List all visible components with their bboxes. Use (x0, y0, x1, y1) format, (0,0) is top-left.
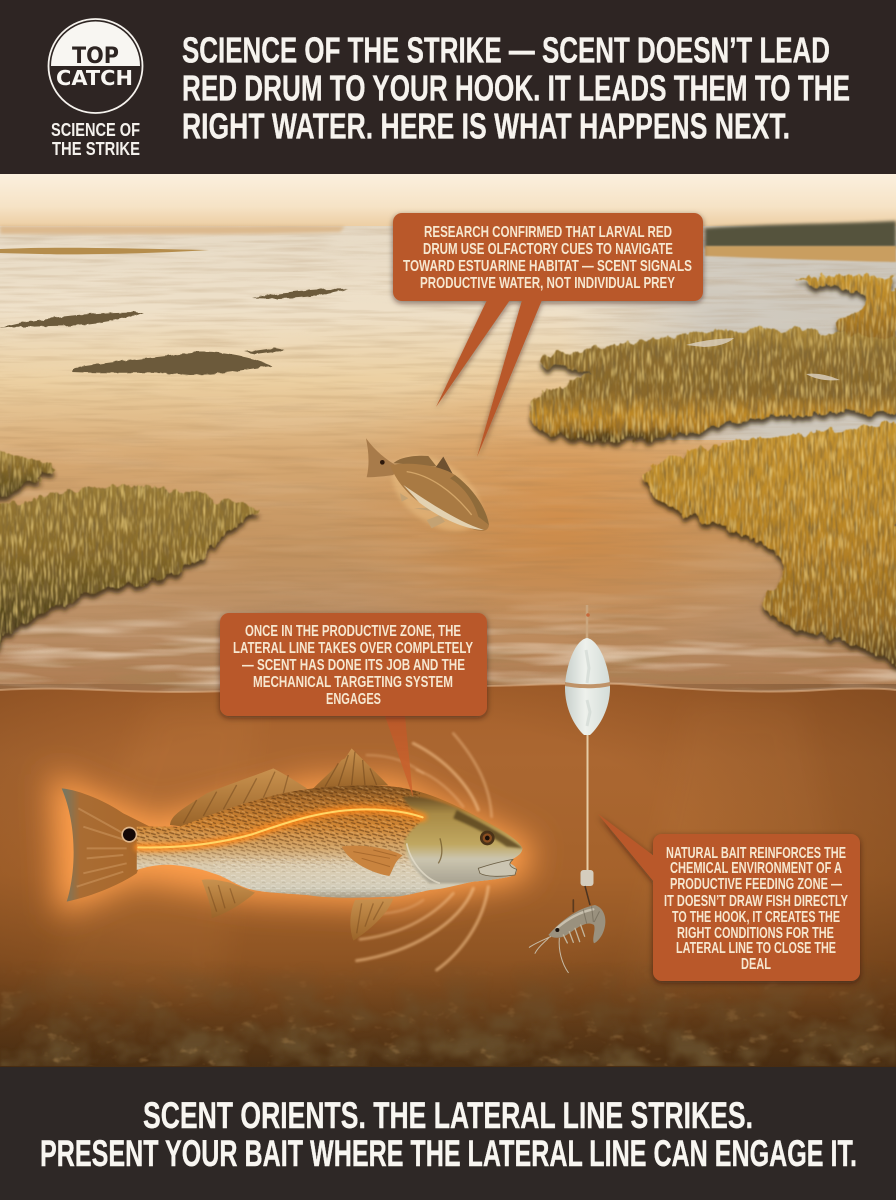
callout pointer (385, 716, 413, 797)
body (133, 783, 527, 900)
dorsal fins (170, 748, 388, 827)
glow halo (62, 787, 522, 902)
logo caption: SCIENCE OF (51, 120, 140, 140)
tail (366, 438, 398, 477)
callout text (233, 623, 473, 708)
logo badge: CATCH (56, 66, 133, 90)
callout: natural bait (598, 814, 860, 981)
logo badge (48, 19, 142, 113)
headline (182, 30, 850, 146)
callout pointer (598, 814, 654, 882)
logo badge: TOP (72, 44, 119, 69)
underwater zone (0, 684, 896, 1067)
callout text: ONCE IN THE PRODUCTIVE ZONE, THE (245, 623, 461, 640)
caudal fin (62, 788, 153, 902)
seagrass bottom (0, 992, 896, 1066)
antenna (586, 605, 590, 640)
callout text: TOWARD ESTUARINE HABITAT — SCENT SIGNALS (403, 258, 692, 275)
logo caption (51, 120, 140, 159)
marsh: lower left (0, 486, 258, 648)
lateral line (138, 809, 423, 847)
far shoreline (0, 221, 896, 262)
eyespot (121, 827, 137, 843)
bobber (565, 638, 610, 735)
callout pointers (436, 300, 542, 457)
dorsal fins (393, 456, 437, 467)
marsh: lower right (643, 422, 896, 664)
leader (585, 886, 590, 905)
main red drum with glowing lateral line (62, 733, 527, 970)
callout text (403, 224, 692, 292)
estuary water surface (0, 226, 896, 692)
marsh: upper left (0, 450, 56, 497)
callout text: LATERAL LINE TAKES OVER COMPLETELY (233, 640, 473, 657)
mud islands (0, 289, 348, 375)
callout: lateral line engages (220, 613, 487, 797)
footer band (0, 1067, 896, 1200)
channel glints (686, 338, 840, 380)
logo caption: THE STRIKE (52, 139, 140, 159)
sky (0, 174, 896, 228)
float rig (529, 605, 610, 973)
pectoral fin (342, 846, 403, 876)
small red drum swimming (366, 438, 495, 547)
callout text: — SCENT HAS DONE ITS JOB AND THE (242, 657, 465, 674)
shrimp bait (529, 900, 605, 973)
eye (480, 831, 495, 845)
callout text: DRUM USE OLFACTORY CUES TO NAVIGATE (423, 241, 673, 258)
head (403, 796, 527, 883)
callout text (664, 845, 848, 973)
header band (0, 0, 896, 174)
marsh: upper right (795, 277, 896, 348)
callout text: RIGHT CONDITIONS FOR THE (677, 925, 834, 942)
line (586, 735, 588, 870)
mouth (478, 859, 517, 876)
callout text: ENGAGES (326, 691, 381, 708)
marsh: middle right (529, 329, 896, 440)
swivel (580, 870, 594, 886)
callout: larval scent research (393, 213, 703, 457)
footer text (40, 1095, 857, 1174)
body (390, 464, 489, 531)
callout text: MECHANICAL TARGETING SYSTEM (253, 674, 453, 691)
anal and ventral fins (202, 879, 393, 941)
sonar arcs (357, 733, 492, 970)
callout text: RESEARCH CONFIRMED THAT LARVAL RED (424, 224, 672, 241)
callout text: PRODUCTIVE WATER, NOT INDIVIDUAL PREY (420, 275, 675, 292)
callout text: DEAL (741, 956, 771, 973)
